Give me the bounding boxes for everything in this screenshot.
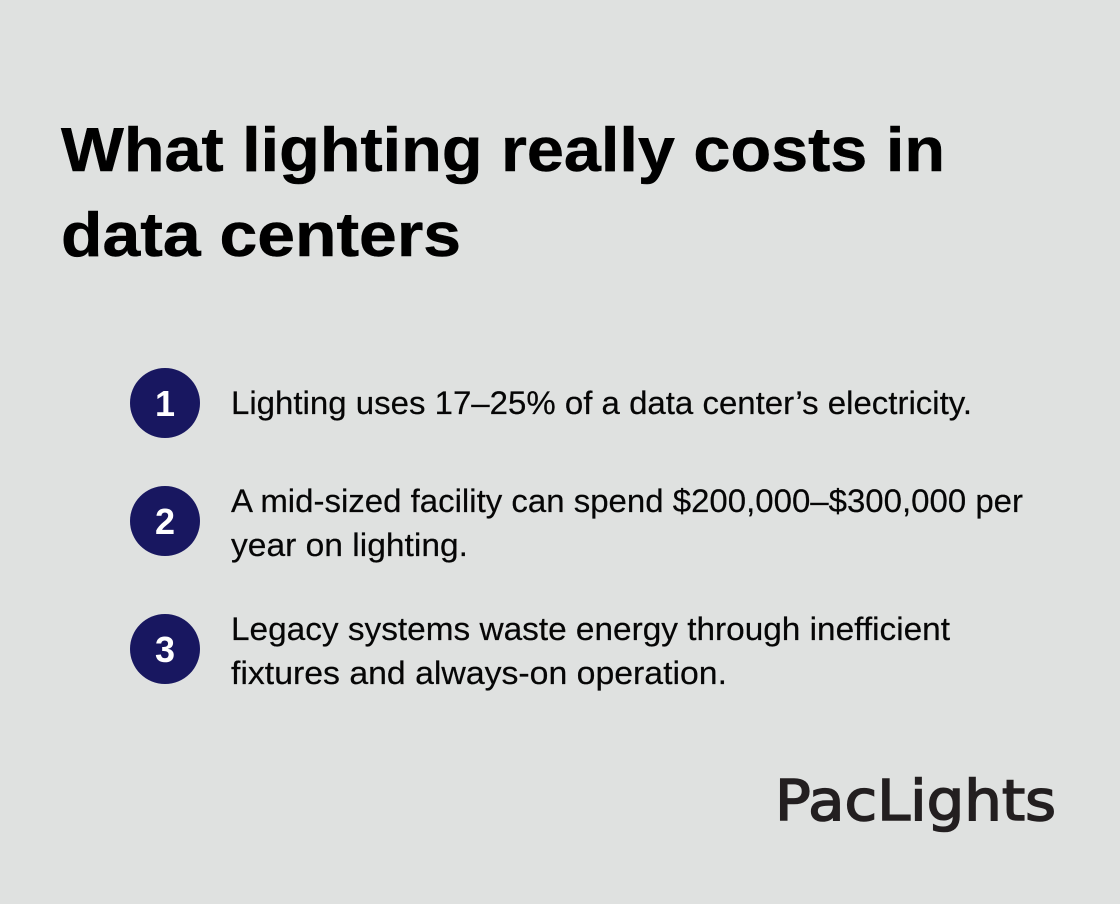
- list item 1: [130, 368, 972, 438]
- item 1 text: Lighting uses 17–25% of a data center’s electricity.: [231, 385, 972, 421]
- number badge 2: [130, 486, 200, 556]
- logo: PacLights wordmark: PacLights: [775, 769, 1056, 834]
- number badge 1: 1: [155, 383, 175, 424]
- list item 3: [130, 611, 950, 691]
- item 2 text: A mid-sized facility can spend $200,000–$300,000 per: [231, 483, 1023, 519]
- number badge 2: 2: [155, 501, 175, 542]
- title: [61, 116, 945, 270]
- item 3 text: Legacy systems waste energy through inefficient: [231, 611, 950, 647]
- item 3 text: [231, 611, 950, 691]
- title: data centers: [61, 201, 461, 270]
- item 3 text: fixtures and always-on operation.: [231, 655, 727, 691]
- item 2 text: [231, 483, 1023, 563]
- number badge 3: [130, 614, 200, 684]
- title: What lighting really costs in: [61, 116, 945, 185]
- item 2 text: year on lighting.: [231, 527, 468, 563]
- list item 2: [130, 483, 1023, 563]
- number badge 1: [130, 368, 200, 438]
- number badge 3: 3: [155, 629, 175, 670]
